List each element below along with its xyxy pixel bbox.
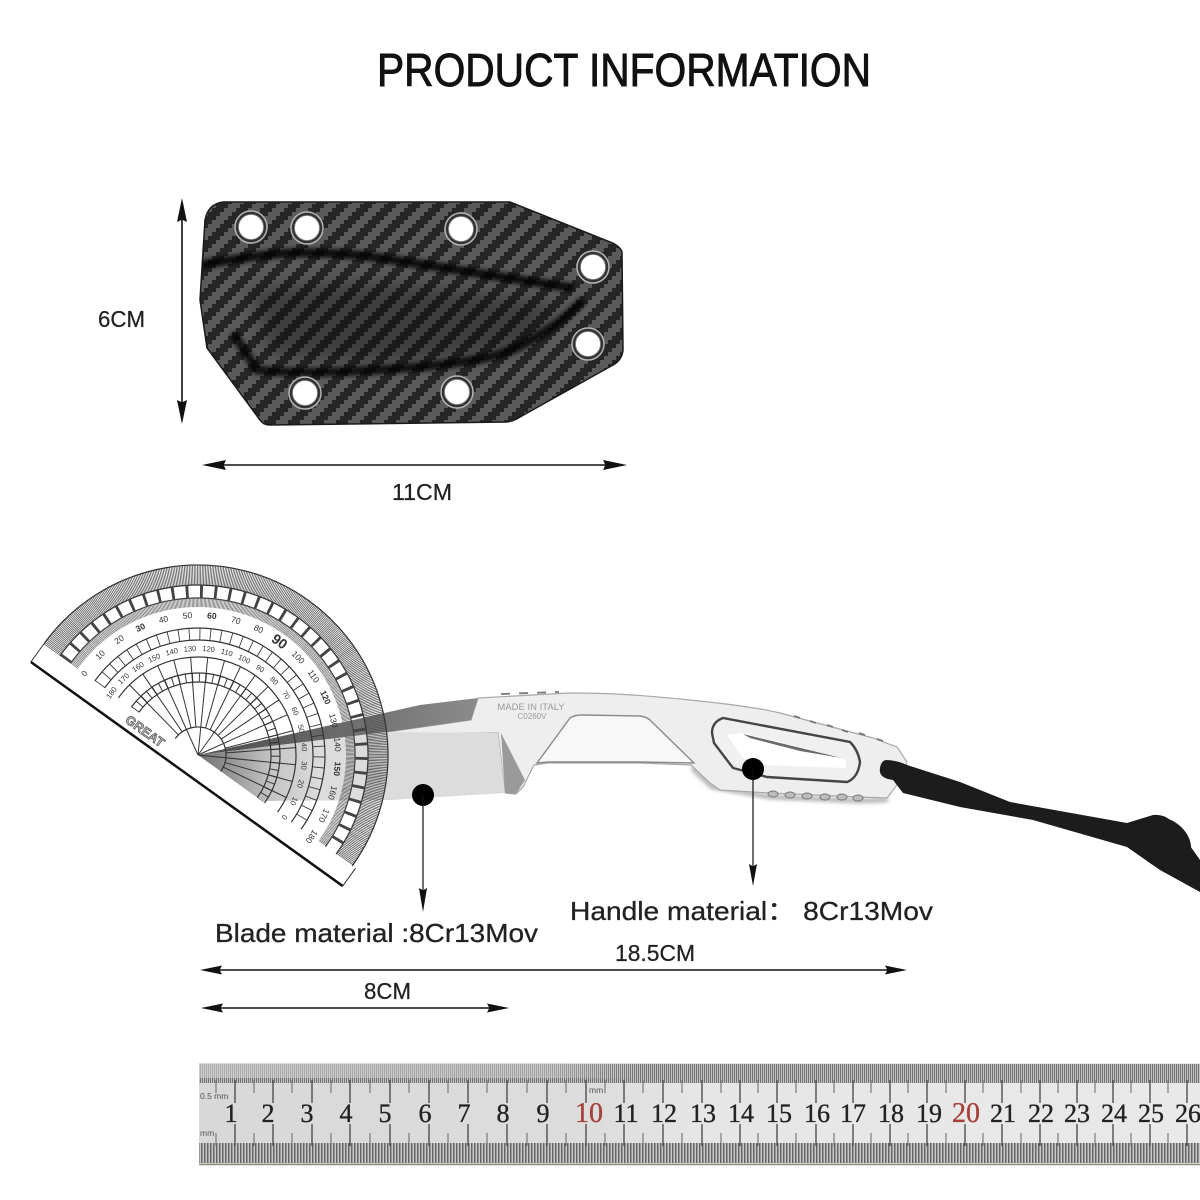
ruler bottom edge	[199, 1164, 1200, 1166]
ruler numbers: 22	[1028, 1099, 1054, 1128]
ruler small unit labels	[200, 1085, 603, 1138]
ruler numbers: 6	[418, 1099, 432, 1128]
outer degree numbers: 120	[318, 689, 333, 706]
inner degree numbers: 70	[280, 689, 292, 701]
ruler numbers: 18	[878, 1099, 904, 1128]
handle marker dot	[742, 758, 764, 780]
inner degree numbers: 170	[116, 671, 131, 686]
inner degree numbers: 120	[202, 644, 215, 654]
centimetre ticks	[235, 1080, 1187, 1146]
ruler bottom graduations	[199, 1143, 1200, 1163]
protractor spokes	[120, 619, 334, 811]
blade engraving: MADE IN ITALY	[497, 702, 565, 713]
ruler numbers: 25	[1138, 1099, 1164, 1128]
inner degree numbers: 90	[254, 662, 266, 675]
ruler numbers: 21	[990, 1099, 1016, 1128]
ruler small unit labels: 0.5 mm	[200, 1091, 228, 1101]
ruler numbers	[224, 1098, 1200, 1129]
ruler numbers: 20	[952, 1098, 980, 1129]
inner degree numbers	[104, 600, 353, 825]
ruler numbers: 3	[300, 1099, 314, 1128]
ruler small unit labels: mm	[200, 1128, 214, 1138]
blade marker dot	[412, 784, 434, 806]
outer degree numbers: 160	[326, 785, 340, 801]
inner degree numbers: 150	[147, 651, 162, 665]
overall length label: 18.5CM	[615, 940, 695, 966]
knife	[198, 692, 1200, 892]
top wear	[199, 1064, 640, 1078]
ruler numbers: 13	[690, 1099, 716, 1128]
inner degree numbers: 50	[296, 724, 307, 734]
height arrow	[177, 198, 187, 424]
slot inner window	[727, 733, 846, 768]
outer degree numbers: 180	[303, 828, 320, 846]
outer degree numbers: 170	[316, 807, 332, 825]
inner degree numbers: 180	[104, 685, 119, 701]
inner degree numbers: 10	[288, 795, 300, 807]
ruler numbers: 8	[496, 1099, 510, 1128]
outer degree numbers: 100	[290, 649, 307, 666]
steel ruler	[199, 1063, 1200, 1165]
ruler numbers: 7	[458, 1099, 470, 1128]
outer degree numbers: 130	[327, 712, 340, 729]
ruler numbers: 11	[613, 1099, 639, 1128]
ruler numbers: 10	[575, 1098, 603, 1129]
degree scales	[44, 490, 463, 866]
inner degree numbers: 30	[299, 761, 309, 770]
inner degree numbers: 60	[289, 706, 301, 717]
handle and spine	[387, 693, 907, 798]
protractor	[31, 490, 466, 886]
title: PRODUCT INFORMATION	[377, 44, 871, 96]
outer degree numbers: 150	[332, 761, 343, 777]
handle pointer arrow	[749, 769, 757, 886]
ruler numbers: 4	[340, 1099, 352, 1128]
blade pointer arrow	[419, 795, 427, 912]
handle material label: Handle material： 8Cr13Mov	[570, 896, 933, 926]
inner degree numbers: 40	[299, 743, 309, 752]
outer degree numbers: 90	[269, 630, 291, 652]
blade length dimension	[201, 978, 509, 1012]
ruler numbers: 23	[1064, 1099, 1090, 1128]
outer degree numbers	[76, 550, 402, 846]
outer degree numbers: 20	[112, 632, 126, 646]
ruler numbers: 19	[916, 1099, 942, 1128]
ruler numbers: 15	[766, 1099, 792, 1128]
top jimping	[501, 692, 883, 741]
ruler body	[199, 1063, 1200, 1165]
inner degree numbers: 20	[295, 779, 306, 789]
ruler numbers: 1	[224, 1099, 238, 1128]
overall length dimension	[200, 940, 907, 974]
width label: 11CM	[392, 479, 452, 505]
sheath rivet holes	[238, 214, 606, 406]
handle slot	[712, 718, 860, 782]
slot inner edge	[743, 734, 842, 758]
outer degree numbers: 40	[158, 613, 169, 625]
blade length arrow	[201, 1004, 509, 1012]
outer degree numbers: 30	[134, 621, 147, 634]
outer degree numbers: 110	[306, 668, 322, 685]
inner degree numbers: 140	[165, 646, 179, 658]
blade upper bevel	[198, 698, 478, 755]
outer degree numbers: 0	[79, 668, 90, 678]
outer degree numbers: 10	[93, 648, 107, 662]
ruler numbers: 9	[536, 1099, 550, 1128]
ruler numbers: 24	[1101, 1099, 1127, 1128]
protractor outline	[31, 644, 356, 886]
half centimetre ticks	[216, 1080, 1168, 1146]
ruler numbers: 2	[262, 1099, 274, 1128]
finger cut-out outline	[537, 715, 694, 763]
blade heel bevel	[501, 733, 525, 794]
inner degree numbers: 110	[220, 647, 234, 658]
panel: sheath	[98, 198, 627, 505]
outer degree numbers: 140	[332, 737, 343, 752]
outer degree numbers: 50	[182, 610, 193, 621]
protractor brand: GREAT	[123, 712, 168, 750]
ruler top graduations	[199, 1064, 1200, 1083]
inner degree numbers: 130	[183, 644, 197, 654]
ruler numbers: 12	[651, 1099, 677, 1128]
inner degree numbers: 100	[237, 652, 252, 666]
blade engraving: C0260V	[518, 712, 547, 721]
inner degree numbers: 80	[268, 674, 280, 687]
handle bottom shadow	[692, 768, 888, 801]
overall length arrow	[200, 966, 907, 974]
ruler numbers: 17	[840, 1099, 866, 1128]
ruler numbers: 14	[728, 1099, 754, 1128]
blade callout	[215, 784, 538, 948]
ruler small unit labels: mm	[589, 1085, 603, 1095]
ruler numbers: 5	[378, 1099, 392, 1128]
sheath rivet rings	[235, 211, 609, 409]
bottom jimping	[768, 791, 863, 801]
outer degree numbers: 80	[252, 622, 265, 636]
blade length label: 8CM	[364, 978, 411, 1004]
handle callout	[570, 758, 933, 926]
cord	[880, 760, 1200, 892]
inner degree numbers: 160	[130, 660, 146, 674]
blade engraving	[497, 702, 565, 721]
blade main grind	[198, 732, 505, 801]
outer degree numbers: 70	[230, 614, 242, 626]
sheath body	[200, 202, 623, 425]
width arrow	[202, 460, 627, 470]
blade material label: Blade material :8Cr13Mov	[215, 918, 538, 948]
outer degree numbers: 60	[207, 610, 217, 621]
inner degree numbers: 0	[280, 813, 289, 821]
height label: 6CM	[98, 306, 145, 332]
ruler numbers: 16	[804, 1099, 830, 1128]
